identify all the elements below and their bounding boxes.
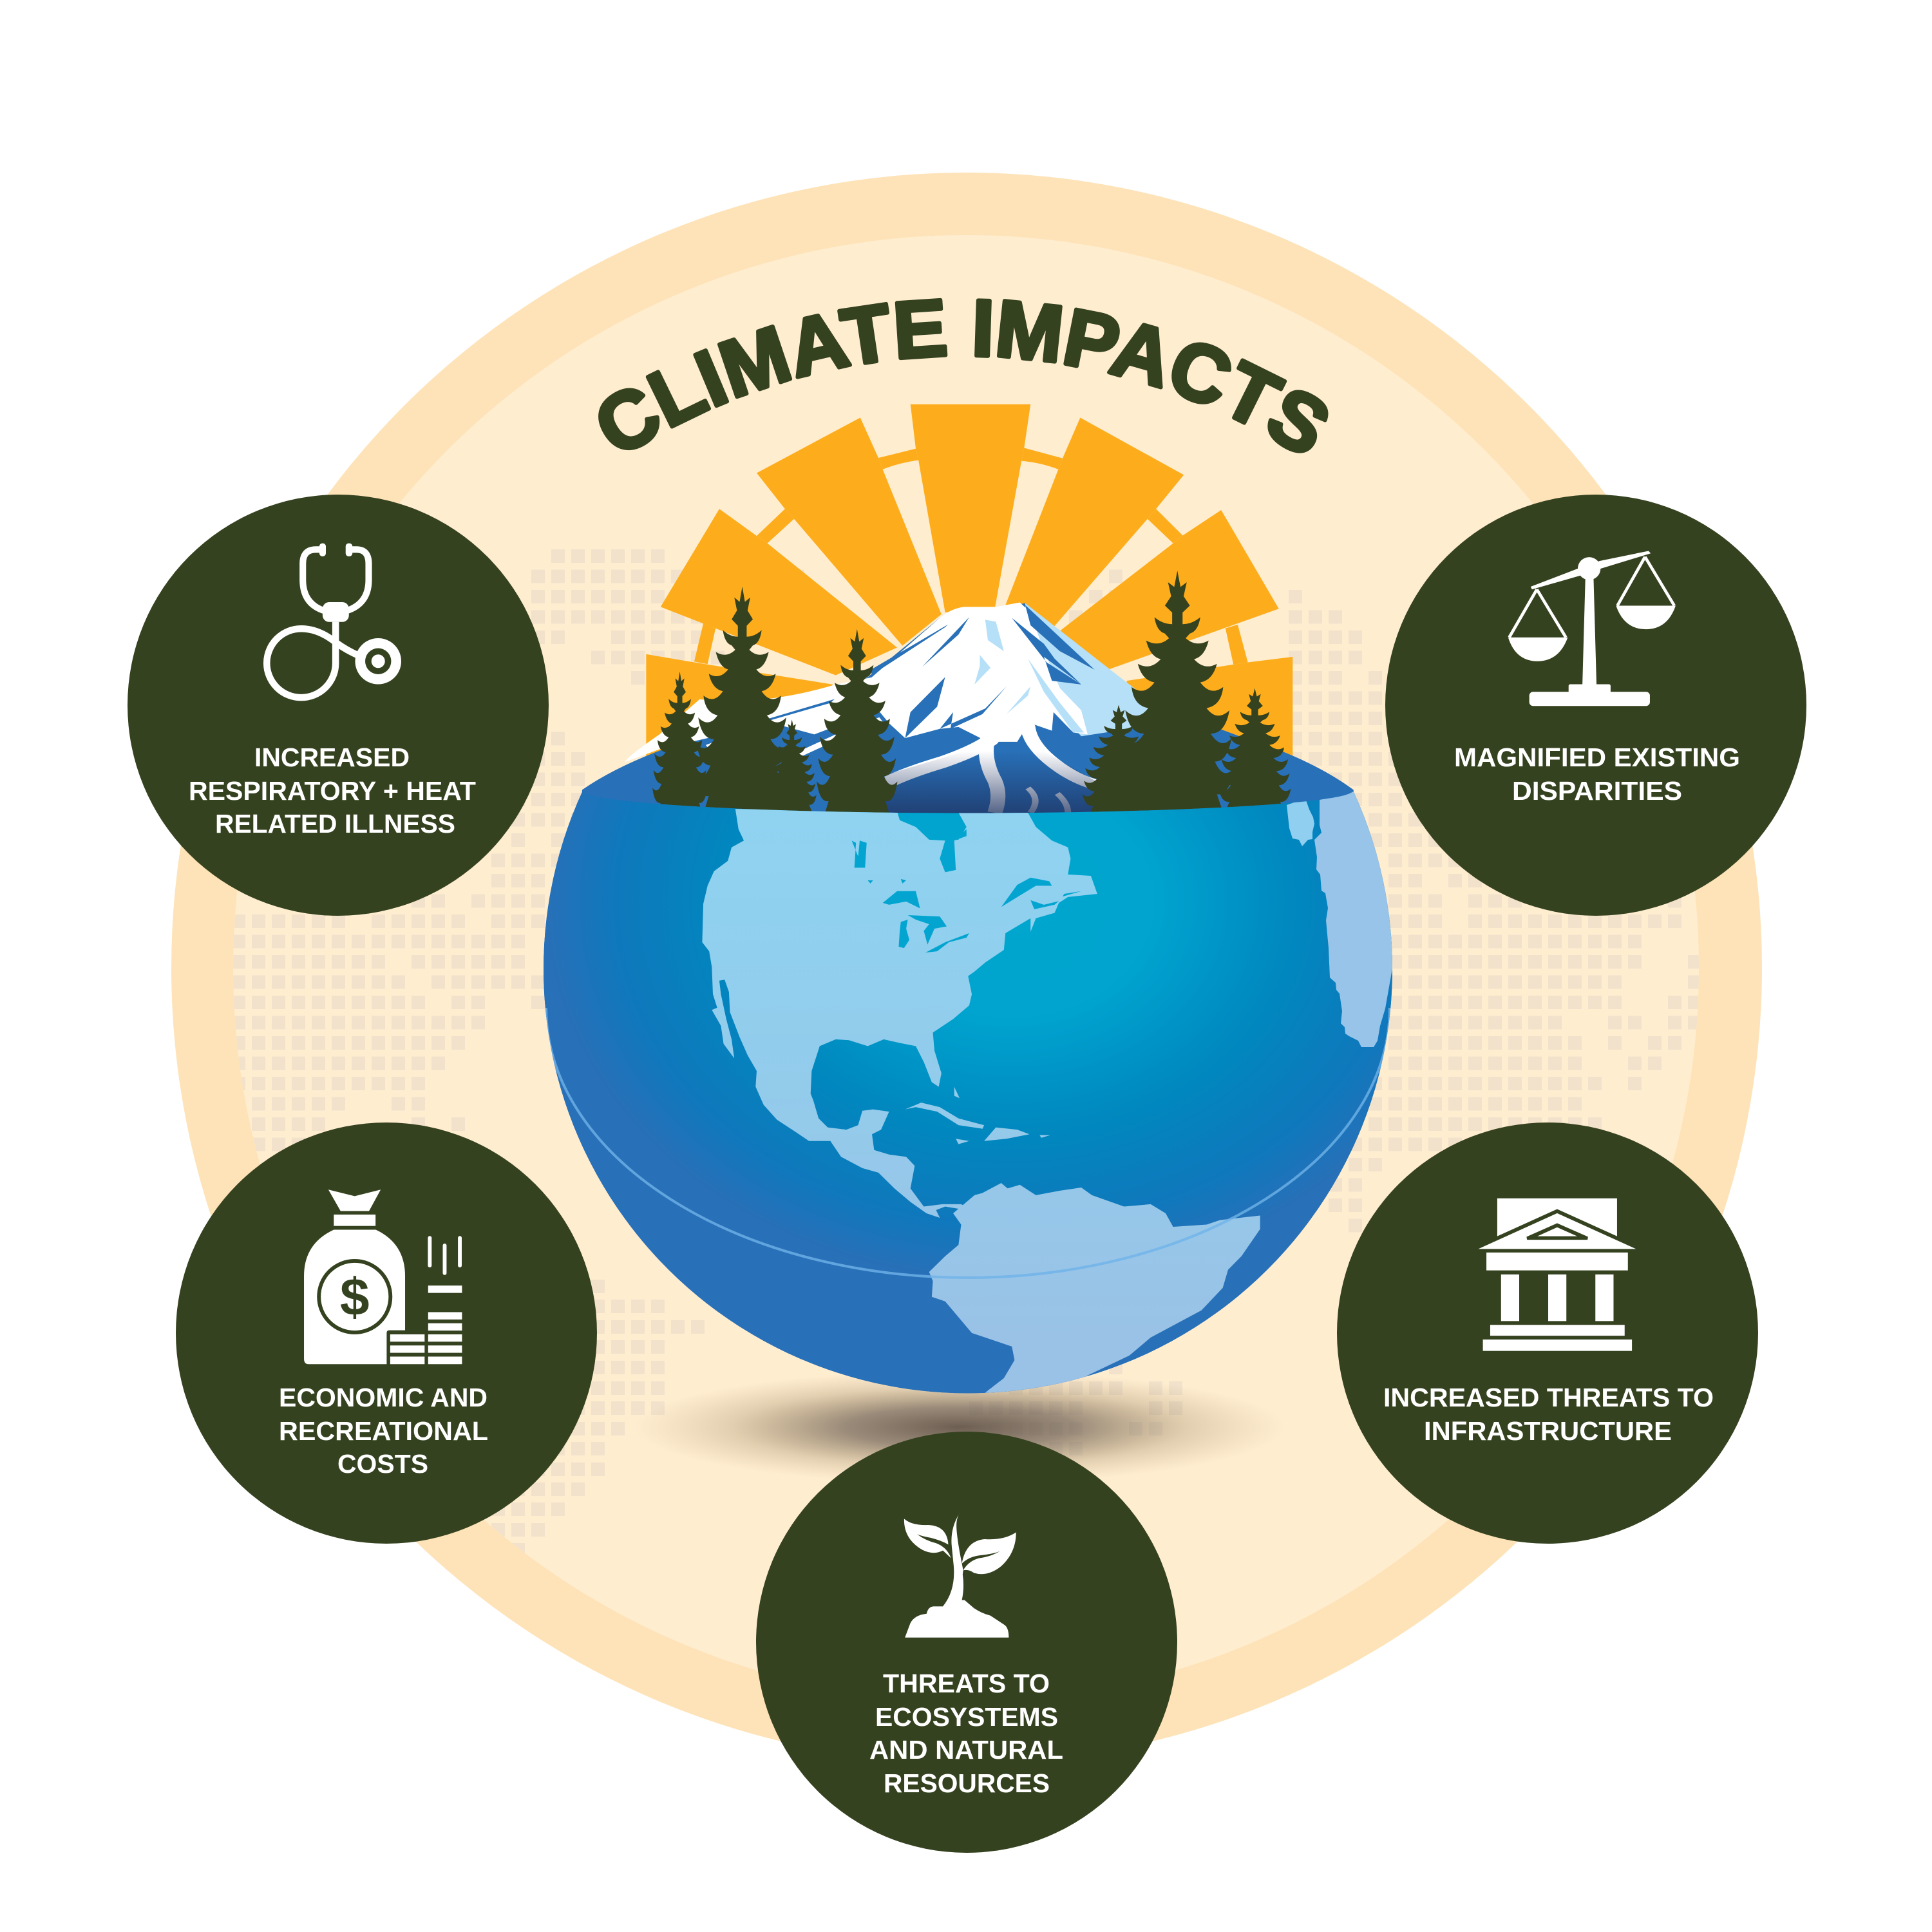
label bbox=[1454, 743, 1740, 806]
equator highlight line bbox=[546, 1008, 1390, 1278]
dotted world map bbox=[232, 556, 1701, 1549]
snow rivers on the lower slope bbox=[867, 740, 990, 804]
Caribbean islands bbox=[905, 1087, 1050, 1144]
left snow shoulder bbox=[625, 677, 873, 762]
label: THREATS TO bbox=[883, 1669, 1050, 1698]
panel: respiratory and heat illness bbox=[128, 495, 549, 916]
icon: balance scale bbox=[1508, 551, 1676, 706]
label: INFRASTRUCTURE bbox=[1424, 1416, 1672, 1446]
sunburst rays bbox=[646, 404, 1293, 759]
panel: magnified disparities bbox=[1385, 495, 1806, 916]
icon: money bag and coins bbox=[304, 1189, 462, 1364]
label: RESOURCES bbox=[884, 1768, 1050, 1798]
globe body bbox=[544, 791, 1392, 1393]
South America bbox=[929, 1183, 1260, 1405]
globe bbox=[544, 789, 1401, 1405]
label bbox=[1383, 1383, 1714, 1446]
light blue mountain face bbox=[1025, 603, 1156, 736]
lakes and Gulf of St Lawrence bbox=[852, 829, 1081, 952]
ground shadow under globe bbox=[634, 1370, 1285, 1484]
label: AND NATURAL bbox=[869, 1735, 1063, 1765]
ocean gradient bbox=[544, 791, 1392, 1393]
main snow cap bbox=[766, 602, 1088, 742]
label bbox=[279, 1383, 488, 1479]
label: ECOSYSTEMS bbox=[875, 1702, 1058, 1732]
label: MAGNIFIED EXISTING bbox=[1454, 743, 1740, 772]
title: curved heading: CLIMATE IMPACTS bbox=[598, 298, 1328, 453]
label: COSTS bbox=[337, 1449, 428, 1479]
Africa bbox=[1314, 789, 1401, 1047]
icon: money bag and coins: $ bbox=[340, 1268, 370, 1327]
label: RELATED ILLNESS bbox=[215, 809, 455, 838]
panel: economic and recreational costs bbox=[176, 1122, 597, 1544]
fir trees bbox=[652, 571, 1291, 815]
icon: seedling bbox=[904, 1513, 1016, 1638]
label: RECREATIONAL bbox=[279, 1416, 488, 1446]
label: DISPARITIES bbox=[1512, 776, 1682, 806]
continents bbox=[546, 789, 1401, 1405]
label: RESPIRATORY + HEAT bbox=[189, 776, 476, 806]
blue rock streaks bbox=[867, 605, 1095, 738]
label: INCREASED THREATS TO bbox=[1383, 1383, 1714, 1412]
icon: stethoscope bbox=[267, 544, 401, 697]
mountain and forest on the globe cap bbox=[582, 571, 1354, 821]
mountain base fade bbox=[862, 744, 1113, 814]
label: ECONOMIC AND bbox=[279, 1383, 488, 1412]
background outer circle bbox=[171, 173, 1762, 1763]
panel: threats to ecosystems bbox=[756, 1432, 1177, 1853]
label bbox=[869, 1669, 1063, 1798]
Greenland tip bbox=[1287, 799, 1314, 846]
blue dome cap bbox=[582, 603, 1354, 821]
background inner circle bbox=[233, 235, 1699, 1701]
label: INCREASED bbox=[254, 743, 410, 772]
label bbox=[189, 743, 476, 838]
North America bbox=[702, 809, 1097, 1218]
icon: classical building bbox=[1478, 1198, 1636, 1351]
panel: threats to infrastructure bbox=[1337, 1122, 1758, 1544]
light blue snow highlights bbox=[974, 620, 1084, 733]
